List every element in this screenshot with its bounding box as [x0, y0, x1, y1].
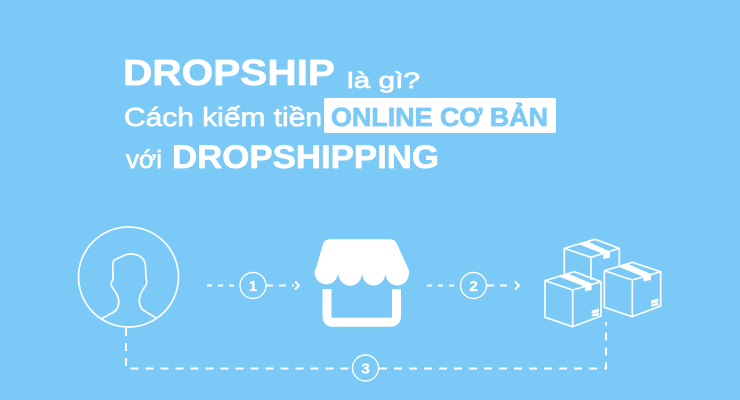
arrow: store to warehouse [427, 272, 519, 298]
title line 2: Cách kiếm tiền [124, 102, 322, 132]
step 3 badge [352, 355, 378, 381]
title line 2 [124, 98, 556, 133]
back box [564, 239, 619, 280]
arrow: customer to store [207, 272, 299, 298]
icon: store [314, 239, 409, 322]
title line 3: DROPSHIPPING [172, 139, 439, 175]
icon: boxes [545, 239, 661, 327]
arrow: return path from warehouse to customer [126, 322, 606, 381]
title line 2: ONLINE CƠ BẢN [331, 102, 548, 132]
title line 1: DROPSHIP [123, 52, 335, 93]
title line 1: là gì? [347, 68, 420, 93]
step 2 badge: 2 [469, 278, 478, 295]
step 3 badge: 3 [361, 360, 370, 378]
title line 1 [123, 52, 420, 93]
right box [604, 262, 661, 317]
step 1 badge: 1 [249, 278, 257, 295]
front box [545, 272, 601, 327]
title line 3: với [126, 146, 162, 174]
icon: customer avatar [78, 227, 178, 327]
title [123, 52, 556, 175]
